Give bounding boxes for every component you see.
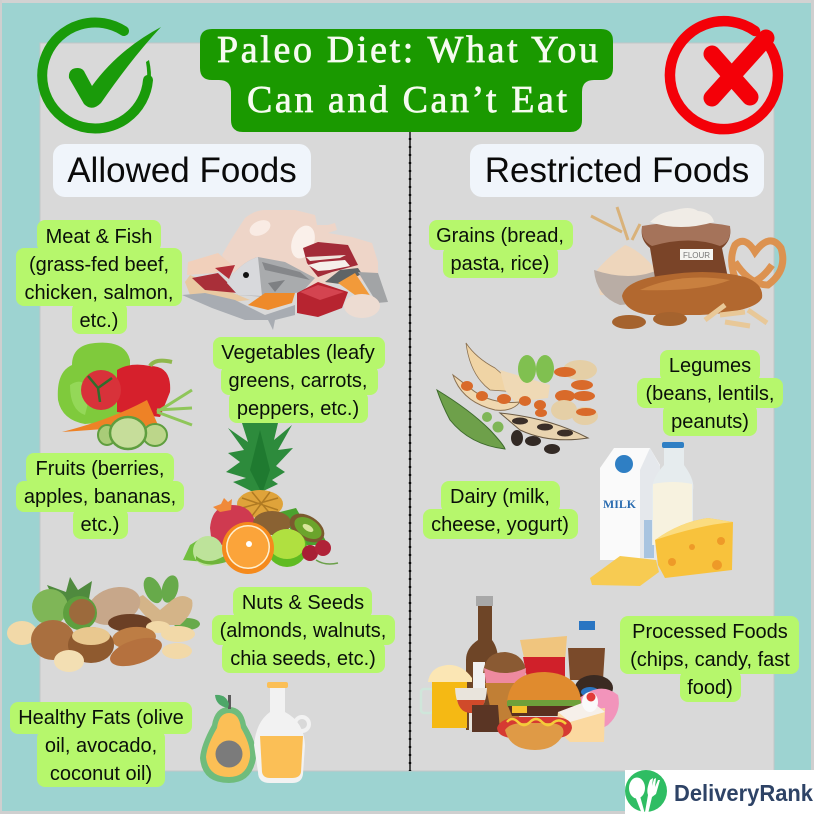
label: vegetables: [213, 337, 385, 423]
title: Can and Can’t Eat: [247, 79, 567, 121]
logo: DeliveryRank: [625, 770, 814, 814]
label: vegetables: greens, carrots,: [229, 370, 367, 392]
column divider: [409, 130, 411, 771]
label: meat and fish: (grass-fed beef,: [29, 254, 169, 276]
label: nuts and seeds: (almonds, walnuts,: [220, 620, 386, 642]
label: dairy: [423, 481, 578, 539]
label: meat and fish: etc.): [80, 310, 118, 332]
label: processed foods: [620, 616, 799, 702]
illustration: grains: FLOUR: [683, 251, 710, 260]
label: meat and fish: [16, 220, 182, 334]
illustration: legumes: [437, 343, 598, 454]
illustration: processed foods: [421, 596, 619, 750]
label: processed foods: food): [687, 677, 733, 699]
label: processed foods: (chips, candy, fast: [630, 649, 790, 671]
label: grains: [429, 220, 573, 278]
label: healthy fats: Healthy Fats (olive: [18, 707, 184, 729]
label: healthy fats: oil, avocado,: [45, 735, 157, 757]
icon: green circle with spoon and fork: [625, 770, 667, 814]
label: vegetables: peppers, etc.): [237, 398, 359, 420]
label: nuts and seeds: [212, 587, 395, 673]
illustration: dairy: [590, 442, 733, 586]
label: legumes: (beans, lentils,: [646, 383, 774, 405]
label: meat and fish: chicken, salmon,: [25, 282, 173, 304]
illustration: meat and fish: [182, 210, 388, 330]
label: nuts and seeds: Nuts & Seeds: [242, 592, 364, 614]
illustration: nuts and seeds: [7, 573, 200, 672]
label: processed foods: Processed Foods: [632, 621, 788, 643]
heading: restricted foods: Restricted Foods: [485, 151, 749, 190]
illustration: fruits: [183, 423, 338, 574]
heading: restricted foods: [470, 144, 764, 197]
label: healthy fats: [10, 702, 192, 787]
label: legumes: [637, 350, 783, 436]
title: Paleo Diet: What You: [217, 29, 598, 71]
label: dairy: Dairy (milk,: [450, 486, 550, 508]
label: legumes: peanuts): [671, 411, 749, 433]
heading: allowed foods: [53, 144, 311, 197]
label: fruits: apples, bananas,: [24, 486, 176, 508]
label: grains: pasta, rice): [451, 253, 549, 275]
label: nuts and seeds: chia seeds, etc.): [230, 648, 376, 670]
label: dairy: cheese, yogurt): [431, 514, 569, 536]
label: grains: Grains (bread,: [436, 225, 564, 247]
illustration: vegetables: [58, 343, 192, 449]
label: fruits: etc.): [81, 514, 119, 536]
label: fruits: [16, 453, 184, 539]
label: legumes: Legumes: [669, 355, 751, 377]
illustration: dairy: MILK: [603, 497, 637, 511]
label: healthy fats: coconut oil): [50, 763, 152, 785]
illustration: avocado and olive oil: [200, 682, 309, 783]
title: [200, 29, 613, 132]
icon: green check mark: [42, 22, 161, 128]
illustration: grains: [591, 207, 783, 329]
label: vegetables: Vegetables (leafy: [221, 342, 375, 364]
heading: allowed foods: Allowed Foods: [67, 151, 297, 190]
label: fruits: Fruits (berries,: [36, 458, 164, 480]
label: meat and fish: Meat & Fish: [46, 226, 152, 248]
icon: red cross: [670, 21, 778, 129]
